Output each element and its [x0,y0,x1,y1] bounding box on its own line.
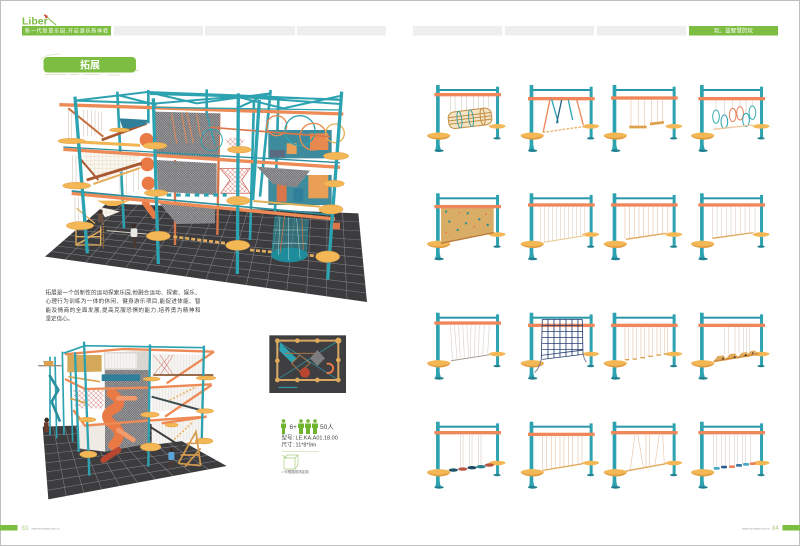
header slogan bar: 新一代智慧乐园,开启游乐新体验 [25,28,108,35]
description text: 能及情商的全面发展,提高克服恐惧的能力,培养勇为精神和 [46,306,200,314]
back structure [117,89,278,245]
module: climbing wall [427,193,506,260]
round platforms [79,376,216,458]
age and capacity [281,419,334,434]
net tower [67,351,149,452]
floor grid [45,203,367,302]
module: hanging rings [691,85,770,152]
slide spheres [140,133,158,219]
figures [98,209,340,248]
orange and teal deck beams [59,105,343,219]
cross rope bridges, left [68,108,148,217]
header tabs right [413,26,686,36]
module: rope bridge slats [604,193,682,260]
module: hump bridge [691,313,770,380]
section title pill: 拓展 [80,58,100,72]
capacity label: 50人 [320,423,334,431]
right block: colored wall and rings [257,116,344,205]
module: colored stirrups [691,422,770,489]
floor grid [43,423,227,499]
spiral slide [103,393,135,460]
footer right [742,525,800,532]
header tabs [114,26,386,36]
model and size: 型号: LE.KA.A01.18.00 [282,434,338,442]
module: fine rope bridge [521,422,599,489]
module: crossed rope bridge [604,422,682,489]
icon: people capacity [298,419,318,434]
footer left: 83 [22,526,29,532]
module: short slats bridge [604,313,682,380]
module: hanging roll [427,85,506,152]
model and size [282,434,338,448]
hanging bridge elements center [107,112,320,256]
module: rope bridge plain [521,193,599,260]
main illustration: rope course, front view [45,89,367,302]
footer right: 84 [772,526,779,532]
header: right page [413,26,778,36]
module: thin rope traverse [427,313,506,380]
header category bar: 玩、益智慧的玩 [714,27,753,35]
header category bar [689,26,778,36]
header slogan bar [22,26,111,36]
secondary illustration: rope course, side view [38,342,227,499]
description text [46,288,200,323]
net cone [271,213,308,262]
climbing nets tower [155,112,220,224]
orange beams [65,349,214,426]
footer left [0,525,60,532]
logo: Liber: Liber [22,16,48,28]
wooden stair frame [178,432,201,467]
apparatus grid [427,85,770,489]
section title pill [41,54,139,75]
white rope wall [152,353,203,445]
module: cargo net [521,313,599,380]
module: dark stepping discs [427,422,506,489]
module: V ropes bridge [521,85,599,152]
icon: customizable box [282,455,298,469]
footer right: www.leyouplay.com.cn [742,526,771,530]
model and size: 尺寸: 11*8*9m [282,440,317,448]
top rail [63,346,205,353]
description text: 拓展是一个创新性的运动探索乐园,他融合运动、探索、娱乐、 [46,288,200,296]
roof frame [75,92,342,108]
logo: Liber [22,14,56,28]
figure [168,448,174,468]
left tower [38,352,73,442]
white rope ladders, left side [68,110,138,223]
hourglass rope nets [220,137,250,193]
module: rope bridge boards [691,193,770,260]
front posts [75,92,342,279]
icon: person age [281,419,286,434]
round platforms [58,128,349,262]
description text: 坚定信心。 [46,315,73,323]
description text: 心理行为训练为一体的休闲、健身游乐项目,能促进体能、智 [46,297,200,305]
header: left page [22,14,386,36]
age label: 6+ [290,424,297,431]
rope bridges [68,375,213,450]
front posts [75,342,204,476]
customization note: • 可根据现场定制 [282,469,309,474]
plan view diagram [269,335,346,393]
footer left: www.leyouplay.com.cn [32,526,60,530]
module: swing boards [604,85,682,152]
wooden stair frame [76,208,103,248]
